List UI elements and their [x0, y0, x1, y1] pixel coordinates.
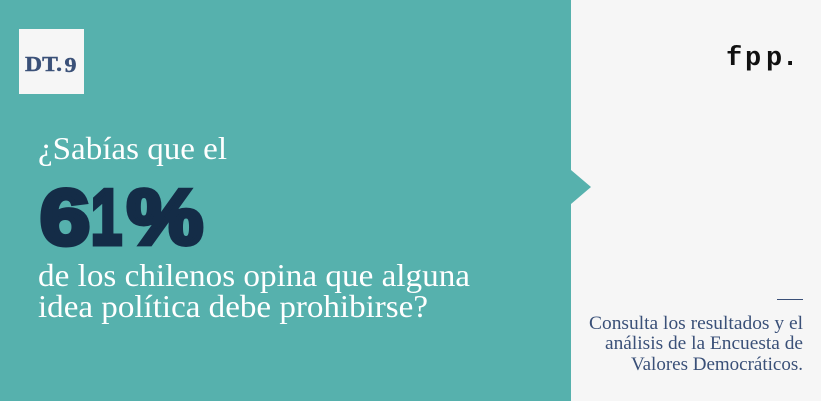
text block: question continuation [38, 257, 470, 324]
text block: call to action: Consulta los resultados y el [589, 313, 803, 334]
badge: DT.9: DT. [25, 52, 62, 76]
text block: call to action: Valores Democráticos. [631, 354, 803, 375]
big number: 61% [40, 173, 203, 261]
text block: call to action: análisis de la Encuesta de [605, 333, 803, 354]
big number: 61%: 6 [40, 173, 90, 261]
text block: call to action [589, 299, 803, 375]
big number: 61%: % [127, 173, 203, 261]
logo: fpp.: fpp. [726, 44, 798, 74]
badge: DT.9: 9 [64, 53, 76, 77]
text block: question continuation: idea política debe prohibirse? [38, 288, 428, 324]
panel: teal main with arrow [0, 0, 591, 401]
big number: 61%: 1 [91, 173, 122, 261]
text block: question continuation: de los chilenos opina que alguna [38, 257, 470, 293]
badge: DT.9 [19, 29, 84, 94]
heading: intro line: ¿Sabías que el [38, 130, 227, 166]
